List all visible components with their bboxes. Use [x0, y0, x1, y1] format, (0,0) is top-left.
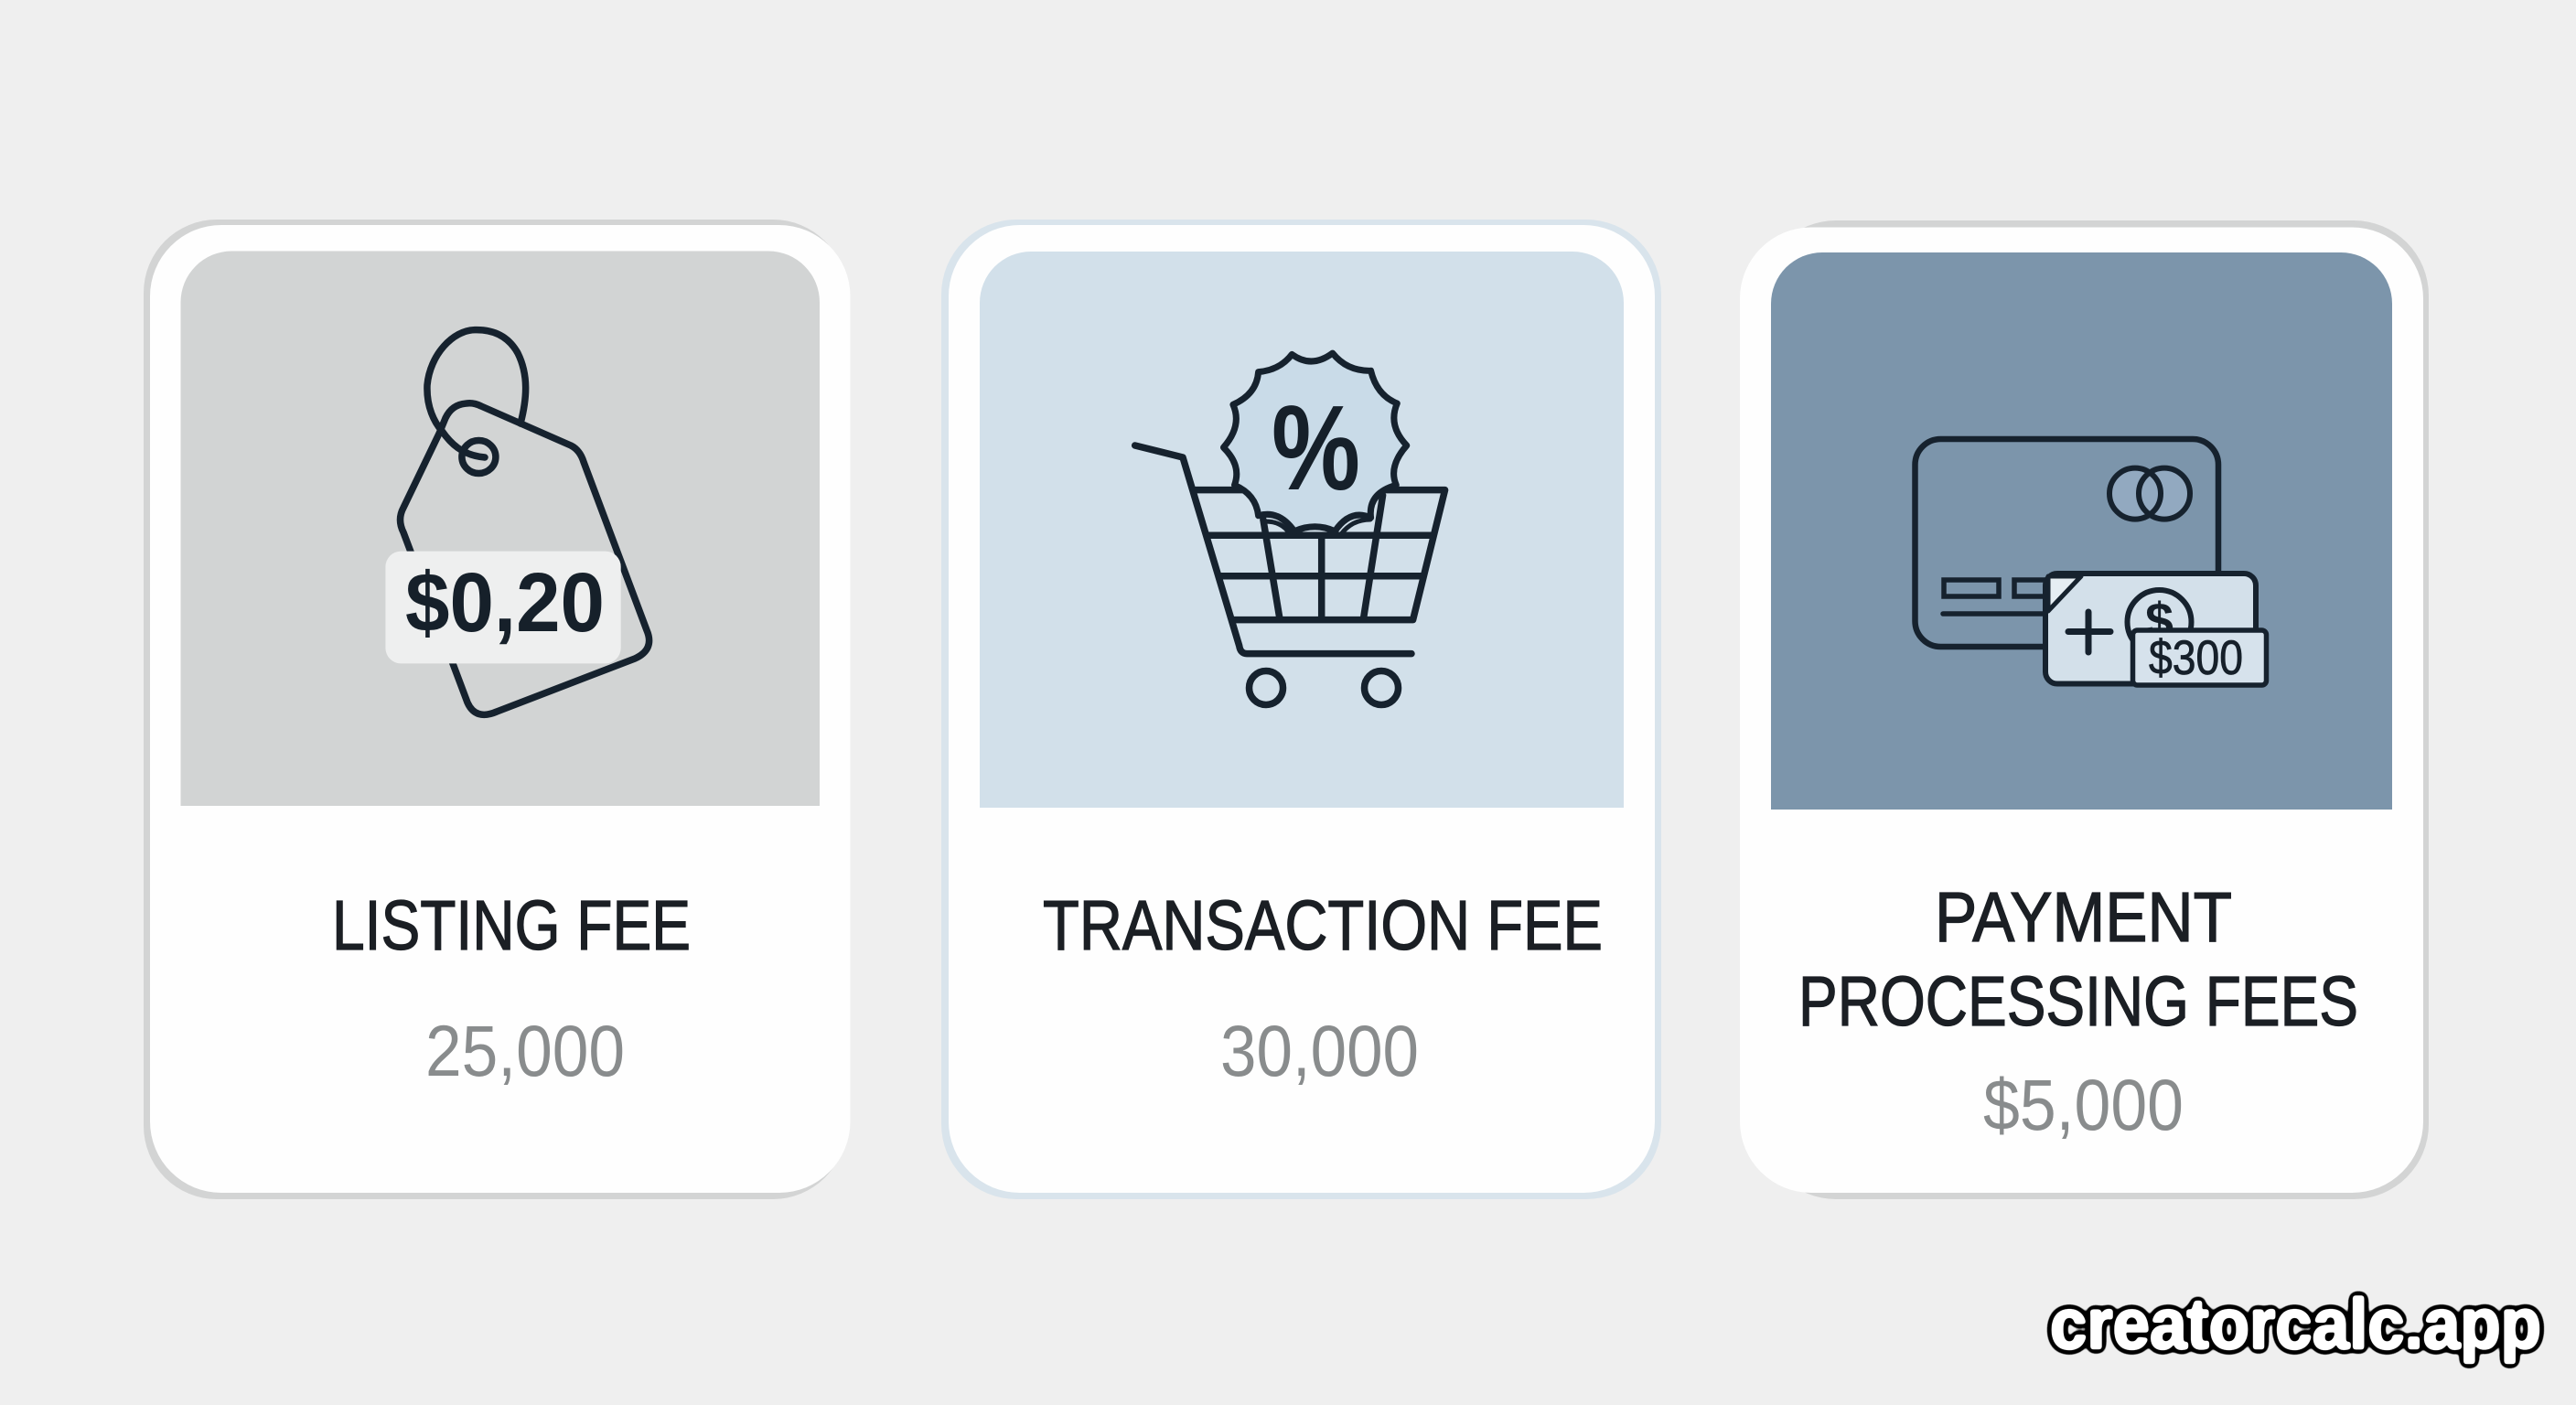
tag outline [401, 403, 649, 714]
image panel: light blue [980, 252, 1624, 808]
cart basket [1194, 490, 1445, 620]
value: 25,000: 25,000 [425, 1010, 625, 1091]
plus sign [2068, 612, 2110, 652]
card frame [941, 220, 1661, 1199]
image panel: grey [180, 251, 820, 806]
watermark: creatorcalc.app: creatorcalc.app [2050, 1283, 2541, 1364]
card logo circles [2109, 468, 2190, 520]
heading: transaction fee: TRANSACTION FEE [1043, 886, 1603, 965]
icon: shopping cart with percent badge [1135, 353, 1445, 704]
tag string [427, 330, 526, 457]
heading: payment processing fees [1798, 878, 2358, 1041]
heading: payment processing fees: PAYMENT [1935, 878, 2232, 957]
cash note [2045, 574, 2256, 684]
cart frame [1135, 445, 1411, 654]
value: $5,000: $5,000 [1983, 1064, 2184, 1145]
heading: payment processing fees: PROCESSING FEES [1798, 962, 2358, 1041]
price label: $0,20 [405, 556, 605, 649]
amount label: $300 [2149, 631, 2243, 685]
card frame [144, 220, 851, 1199]
panel: transaction fee card [941, 220, 1661, 1199]
percent sign: % [1272, 381, 1360, 515]
image panel: slate blue [1771, 252, 2392, 810]
card chips and stripe [1943, 580, 2047, 614]
icon: credit card with cash [1916, 439, 2267, 685]
coin: $ [2145, 592, 2174, 649]
cart wheels [1250, 671, 1398, 704]
coin [2128, 590, 2192, 654]
discount badge [1224, 353, 1407, 531]
panel: payment processing fees card [1740, 220, 2429, 1199]
panel: listing fee card [144, 220, 851, 1199]
card frame [1740, 220, 2429, 1199]
tag hole [462, 441, 496, 474]
value: 30,000: 30,000 [1220, 1010, 1419, 1091]
heading: listing fee: LISTING FEE [332, 886, 691, 965]
credit card outline [1916, 439, 2218, 647]
cart inner arcs [1265, 520, 1370, 534]
cart grid [1208, 495, 1433, 617]
icon: price tag [385, 330, 649, 714]
note corner fold [2048, 576, 2081, 611]
